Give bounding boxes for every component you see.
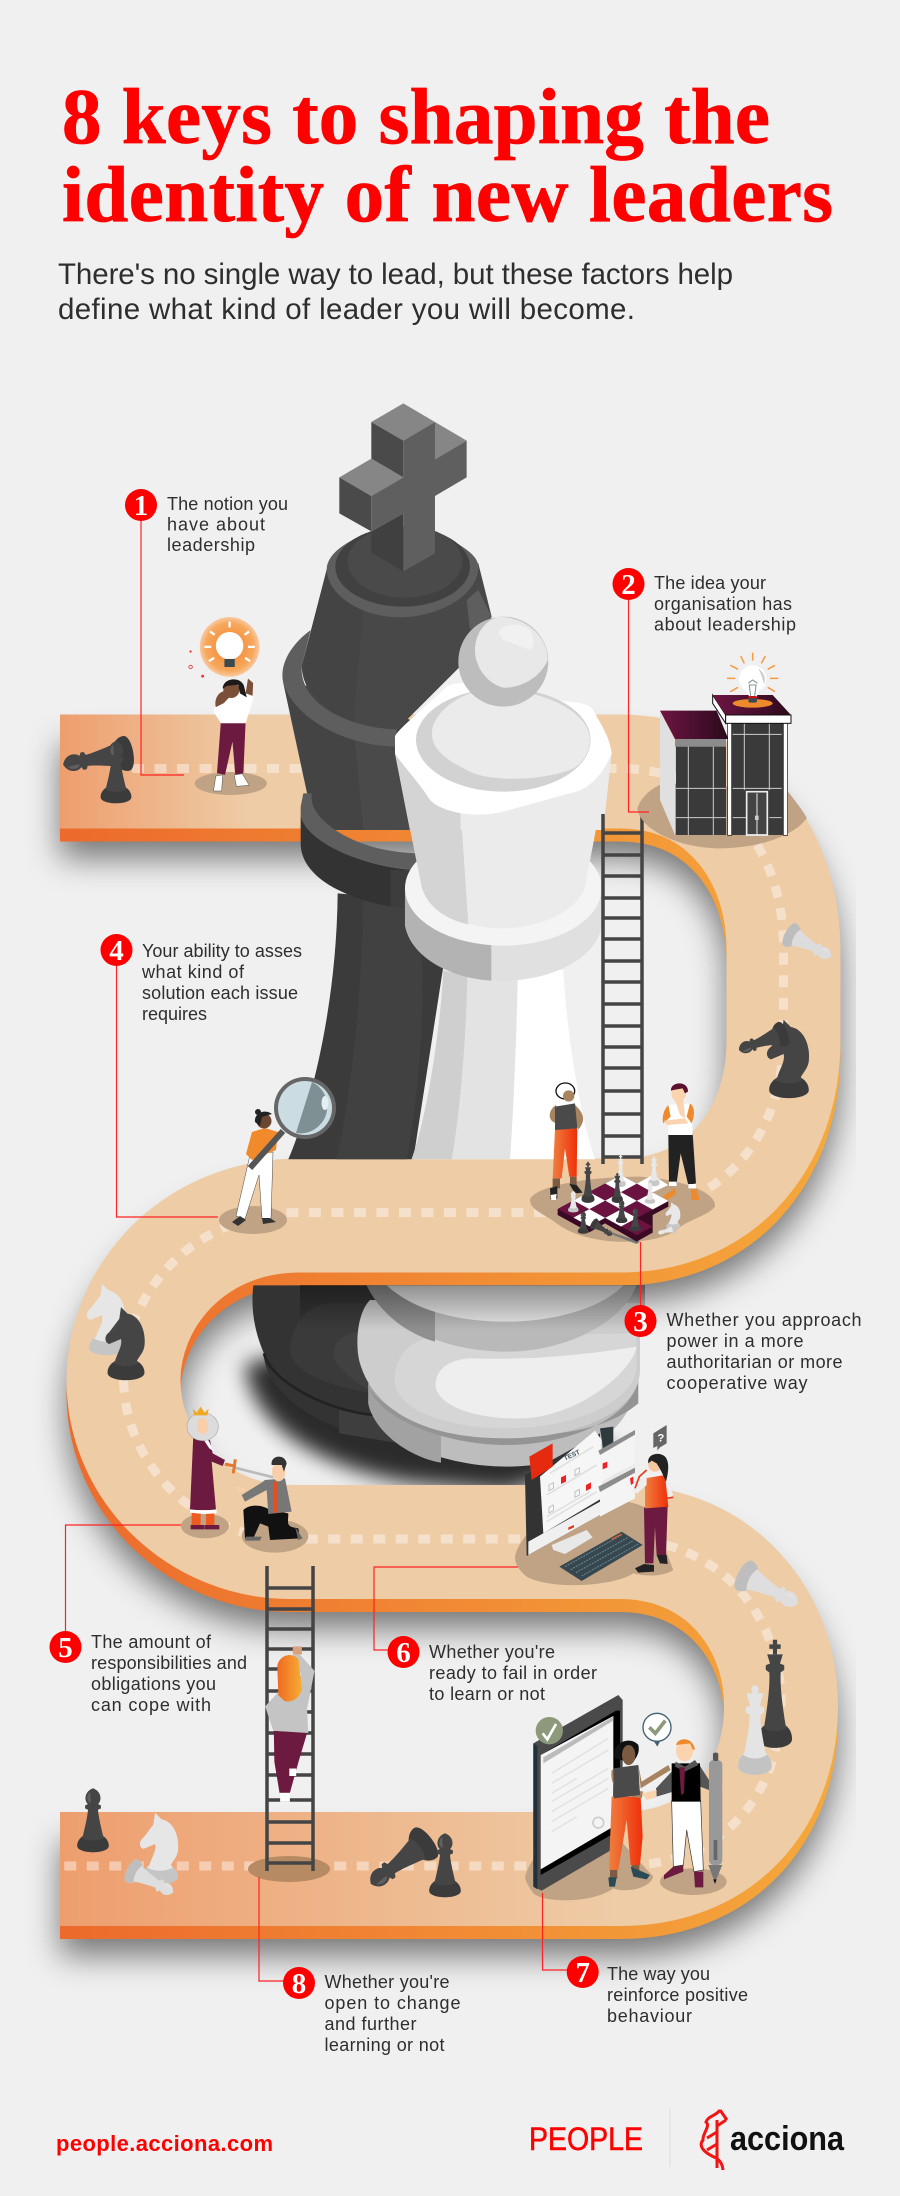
callout 5: responsibilities and [91, 1653, 247, 1673]
callout 6 [374, 1567, 597, 1704]
popup windows [598, 1430, 635, 1517]
callout 3: power in a more [666, 1331, 804, 1351]
tablet [533, 1695, 623, 1891]
footer url: people.acciona.com [56, 2131, 273, 2156]
callout 4: Your ability to asses [142, 941, 302, 961]
callout 1: 1 [134, 490, 148, 522]
king and pawn bases under the road [245, 1285, 645, 1492]
white and dark knights, left bend [87, 1284, 145, 1380]
title: 8 keys to shaping the [62, 74, 770, 161]
callout 1: have about [167, 514, 265, 534]
callout 3: authoritarian or more [666, 1352, 842, 1372]
callout 3: 3 [633, 1306, 648, 1338]
dark and white pieces, road 4 left [77, 1788, 179, 1904]
man shaking hands [642, 1739, 723, 1887]
chess pieces on the board [568, 1155, 680, 1240]
callout 4: requires [142, 1004, 207, 1024]
callout 2: about leadership [654, 614, 796, 634]
callout 8: and further [324, 2014, 416, 2034]
callout 6: to learn or not [429, 1684, 545, 1704]
monitor [525, 1427, 613, 1556]
title: identity of new leaders [62, 152, 833, 239]
giant pen [708, 1753, 722, 1884]
pawn stem and collar [404, 800, 602, 1159]
callout 8: open to change [324, 1993, 460, 2013]
icon: check speech bubble [643, 1713, 671, 1747]
tablet with two people shaking hands [525, 1695, 727, 1900]
icon: acciona tree [701, 2110, 727, 2170]
callout 1: leadership [167, 535, 255, 555]
question mark bubble: ? [657, 1432, 664, 1444]
callout 5: 5 [58, 1632, 73, 1664]
callout 1 [125, 489, 288, 775]
winding road [60, 714, 784, 1926]
callout 7: The way you [607, 1964, 710, 1984]
woman with magnifying glass [219, 1077, 336, 1234]
callout 4: solution each issue [142, 983, 298, 1003]
wordmark: acciona [730, 2120, 845, 2158]
callout 7: behaviour [607, 2006, 692, 2026]
callout 3 [624, 1242, 862, 1393]
test sheet: TEST [563, 1449, 581, 1462]
callout 7: reinforce positive [607, 1985, 748, 2005]
woman with idea bulb [189, 617, 267, 795]
callout 7 [542, 1893, 748, 2026]
callout 1: The notion you [167, 494, 288, 514]
subtitle: There's no single way to lead, but these factors help [58, 258, 733, 291]
callout 5: The amount of [91, 1632, 212, 1652]
fallen dark pawn and dark piece, road 1 [60, 735, 136, 803]
callout 2: organisation has [654, 594, 792, 614]
icon: tablet check badge [536, 1717, 563, 1744]
woman shaking hands [608, 1741, 671, 1887]
subtitle: define what kind of leader you will become. [58, 293, 635, 326]
dark king and white queen, lower right bend [738, 1640, 792, 1775]
callout 8: 8 [292, 1968, 306, 2000]
callout 8 [259, 1877, 460, 2055]
office building with bulb [637, 653, 807, 848]
king upper body [282, 403, 492, 830]
woman player [550, 1083, 583, 1200]
callout 8: learning or not [324, 2035, 444, 2055]
question mark bubble [653, 1425, 667, 1451]
pawn frill, dome and head [395, 617, 612, 830]
king cross [339, 403, 467, 571]
callout 6: Whether you're [429, 1642, 555, 1662]
icon: glowing idea bulb [189, 617, 259, 678]
giant king chess piece [282, 403, 492, 1159]
red folder [529, 1443, 553, 1480]
dark pieces, road 4 centre [360, 1824, 461, 1899]
footer brand: PEOPLE: PEOPLE [529, 2121, 643, 2157]
dark and light pieces on the right bend [735, 921, 837, 1098]
woman climbing the ladder [265, 1646, 315, 1802]
woman [633, 1454, 673, 1573]
ladder upper [603, 814, 642, 1164]
chess board with two players [530, 1083, 715, 1244]
footer divider [669, 2109, 671, 2167]
icon: bulb on the roof [727, 653, 778, 703]
white fallen pawn, lower right bend [731, 1558, 805, 1618]
giant white pawn chess piece [395, 617, 612, 1159]
callout 7: 7 [575, 1957, 590, 1989]
callout 4 [100, 934, 302, 1217]
callout 5 [50, 1525, 247, 1715]
monitor with online test and woman [515, 1425, 673, 1585]
man player [663, 1083, 699, 1200]
callout 2: The idea your [654, 573, 766, 593]
ladder lower [248, 1566, 330, 1882]
callout 3: cooperative way [666, 1373, 808, 1393]
callout 5: can cope with [91, 1695, 211, 1715]
acciona logo [701, 2110, 845, 2170]
callout 8: Whether you're [324, 1972, 450, 1992]
test sheet [540, 1431, 602, 1533]
icon: magnifying glass [274, 1077, 336, 1139]
callout 2 [612, 568, 796, 812]
callout 2: 2 [621, 569, 636, 601]
callout 4: 4 [109, 935, 124, 967]
callout 6: 6 [396, 1637, 411, 1669]
title [62, 74, 833, 239]
king lower body [288, 793, 443, 1159]
callout 4: what kind of [141, 962, 245, 982]
board [555, 1175, 668, 1244]
subtitle [58, 258, 733, 326]
callout 3: Whether you approach [666, 1310, 862, 1330]
keyboard [559, 1532, 643, 1581]
callout 6: ready to fail in order [429, 1663, 597, 1683]
callout 5: obligations you [91, 1674, 216, 1694]
queen knighting a kneeling man [181, 1407, 308, 1553]
